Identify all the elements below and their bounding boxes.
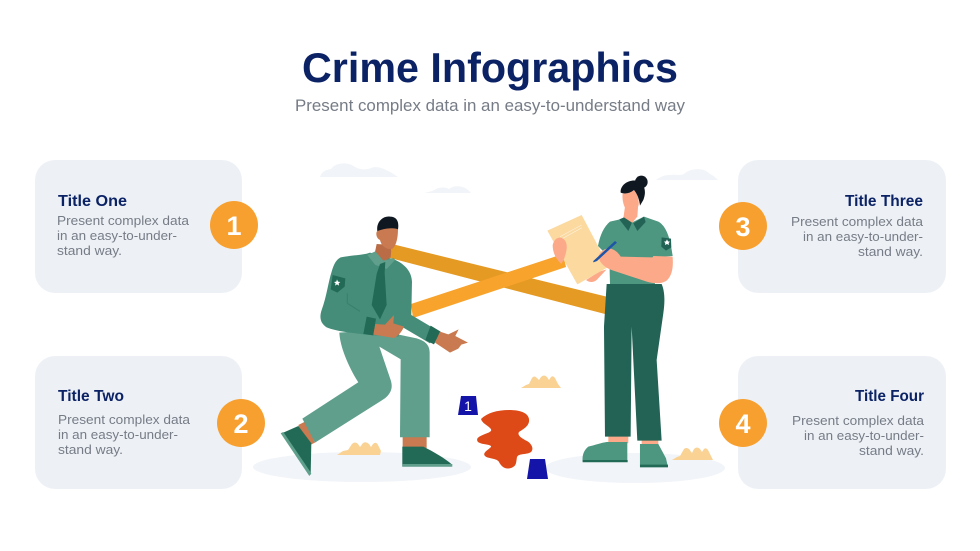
ground shadows (253, 452, 725, 483)
crime scene tape (390, 244, 608, 318)
evidence marker 1: 1 (464, 398, 472, 414)
panel: title two (35, 356, 242, 489)
panel: title two: Present complex data (58, 412, 191, 427)
panel: title three (738, 160, 946, 293)
panel: title two: Title Two (58, 388, 124, 405)
panel: title four: in an easy-to-under- (804, 428, 924, 443)
number badge 4: 4 (735, 409, 751, 439)
number badge 2: 2 (233, 409, 249, 439)
evidence marker 2 (527, 459, 548, 479)
subtitle: Present complex data in an easy-to-understand way (295, 97, 686, 115)
panel: title four: Title Four (855, 388, 924, 405)
panel: title one (35, 160, 242, 293)
panel: title four (738, 356, 946, 489)
clouds (320, 163, 718, 193)
panel: title one: Present complex data (57, 213, 190, 228)
evidence marker 1 (458, 396, 478, 415)
blood stain (477, 410, 532, 469)
woman officer (547, 176, 673, 467)
number badge 4 (719, 399, 767, 447)
panel: title three: Present complex data (791, 214, 924, 229)
panel: title one: stand way. (57, 243, 122, 258)
number badge 3: 3 (735, 212, 751, 242)
number badge 2 (217, 399, 265, 447)
panel: title three: Title Three (845, 193, 923, 210)
panel: title three: in an easy-to-under- (803, 229, 923, 244)
panel: title two: stand way. (58, 442, 123, 457)
sand mounds (337, 376, 713, 460)
number badge 1: 1 (226, 211, 242, 241)
panel: title four: Present complex data (792, 413, 925, 428)
panel: title one: Title One (58, 193, 127, 210)
panel: title four: stand way. (859, 443, 924, 458)
title: Crime Infographics (302, 44, 678, 91)
number badge 3 (719, 202, 767, 250)
panel: title one: in an easy-to-under- (57, 228, 177, 243)
panel: title three: stand way. (858, 244, 923, 259)
panel: title two: in an easy-to-under- (58, 427, 178, 442)
man officer (281, 217, 468, 476)
number badge 1 (210, 201, 258, 249)
